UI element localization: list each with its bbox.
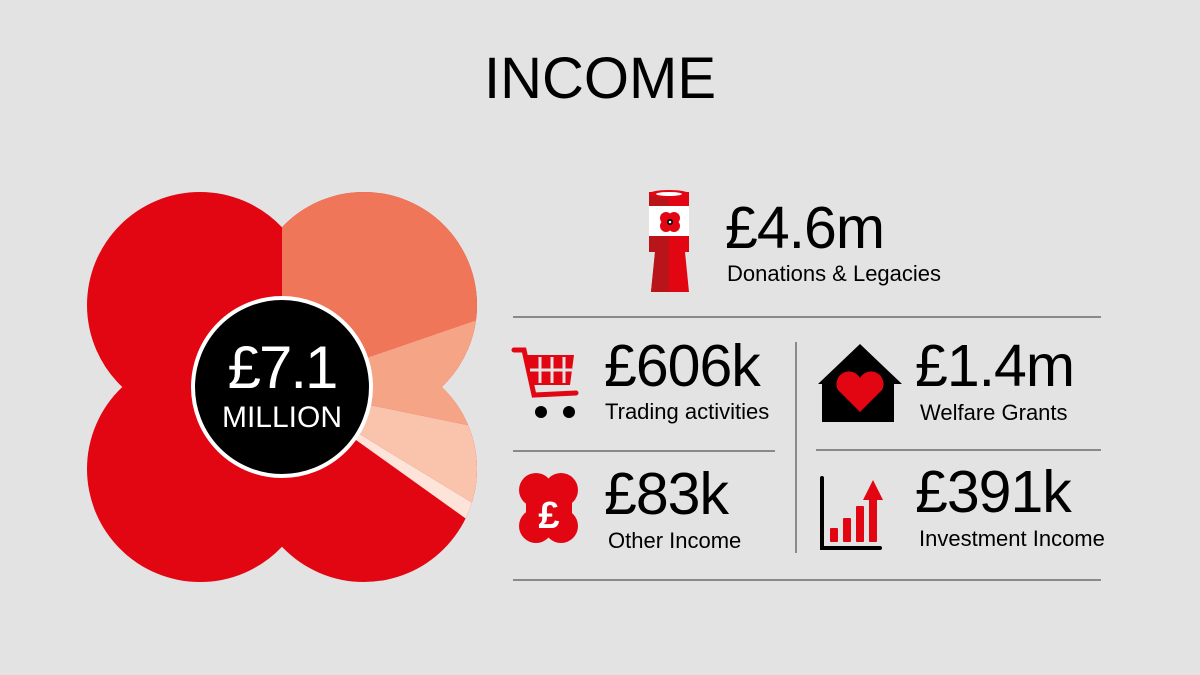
stat: trading: £606k: [604, 333, 760, 399]
text: Other Income: [608, 528, 741, 553]
icon: house heart: [818, 344, 902, 422]
icon: investment chart: [820, 476, 883, 550]
icon: pound poppy: £: [538, 495, 560, 537]
text: Investment Income: [919, 526, 1105, 551]
text: MILLION: [222, 401, 342, 434]
icon: collection tin: [649, 190, 689, 292]
text: Donations & Legacies: [727, 261, 941, 286]
stat: investment: £391k: [915, 459, 1071, 525]
title: INCOME: [484, 46, 716, 111]
chart: poppy pie: [87, 192, 477, 582]
total label: £7.1: [228, 334, 336, 401]
stat: other: £83k: [604, 461, 728, 527]
icon: cart: [512, 348, 578, 418]
text: Trading activities: [605, 399, 769, 424]
stat: donations: £4.6m: [725, 195, 884, 261]
text: Welfare Grants: [920, 400, 1068, 425]
icon: pound poppy: [519, 473, 578, 543]
stat: welfare: £1.4m: [915, 333, 1074, 399]
